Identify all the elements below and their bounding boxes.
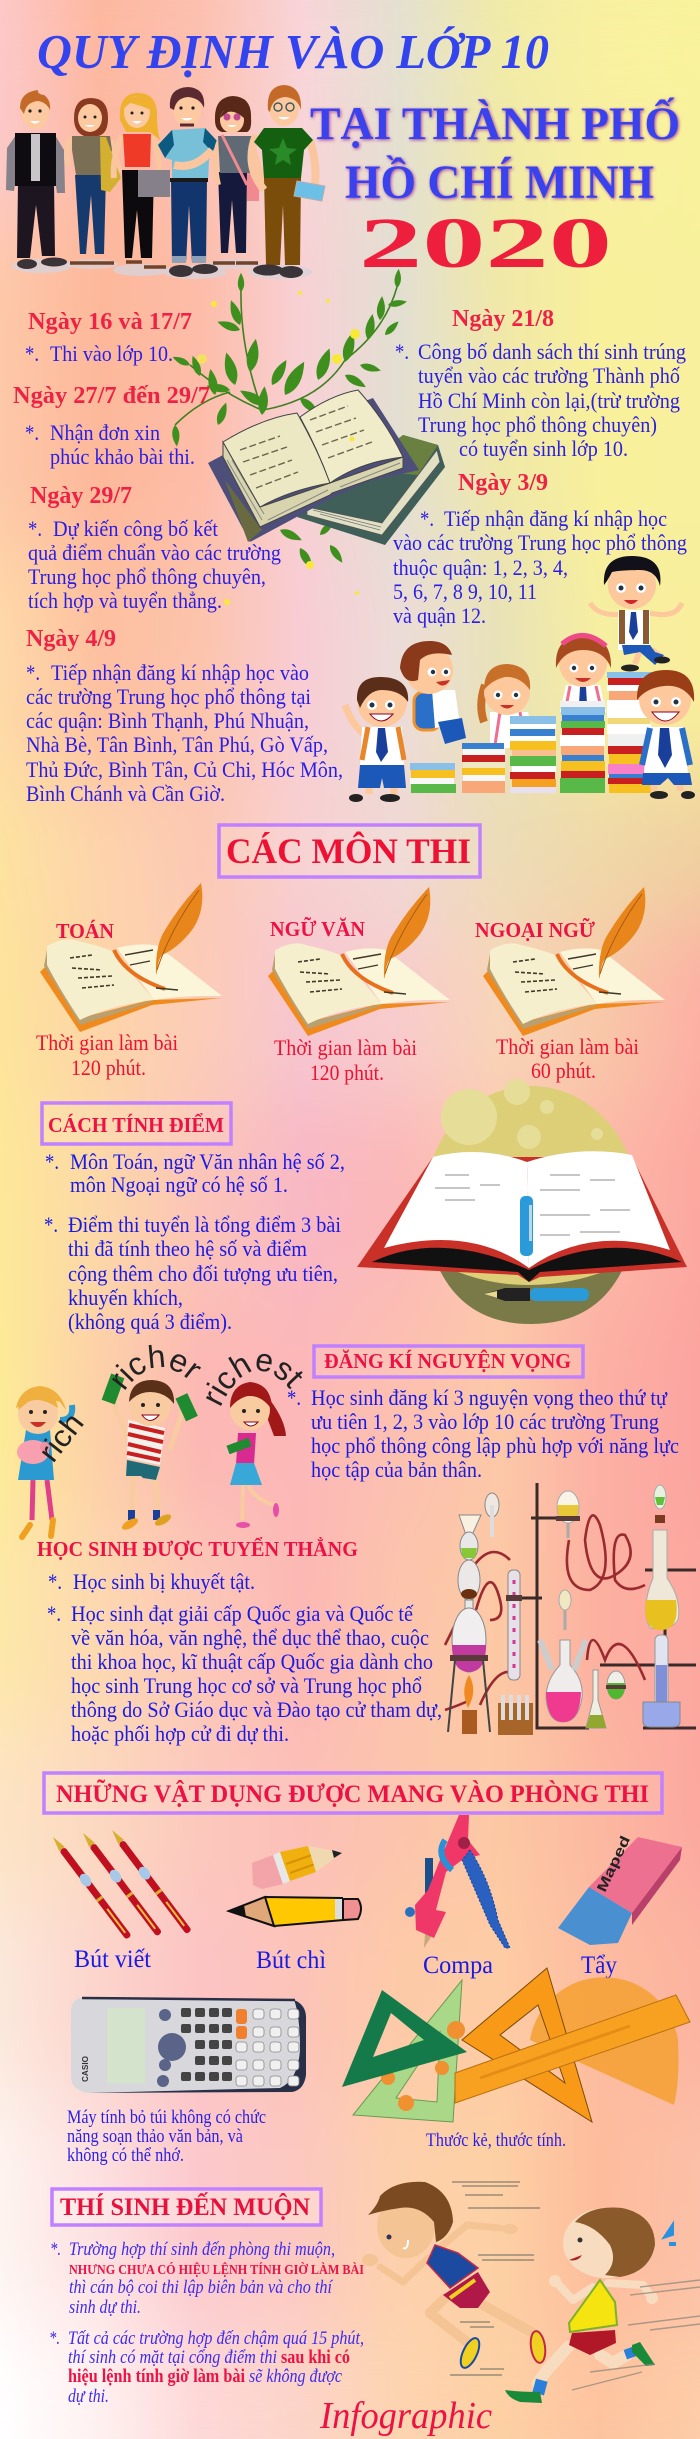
- panel: Toán: TOÁN: [56, 919, 114, 943]
- text block: left schedule: Dự kiến công bố kết: [53, 516, 218, 541]
- text block: left schedule: các trường Trung học phổ thông tại: [26, 684, 311, 709]
- labels: stationery names: [74, 1946, 617, 1979]
- heading: học sinh được tuyển thẳng: HỌC SINH ĐƯỢC TUYỂN THẲNG: [37, 1537, 358, 1561]
- text block: đăng kí nguyện vọng: [287, 1385, 679, 1482]
- text block: left schedule: *.: [28, 516, 42, 541]
- text block: tuyển thẳng: Học sinh đạt giải cấp Quốc gia và Quốc tế: [71, 1601, 414, 1626]
- text block: right schedule: [393, 306, 687, 628]
- text block: left schedule: Ngày 4/9: [26, 626, 116, 652]
- illustration: two running children: [362, 2182, 700, 2403]
- text block: late candidates: dự thi.: [68, 2386, 109, 2407]
- text block: left schedule: *.: [26, 660, 40, 685]
- illustration: big open book with pen: [357, 1079, 687, 1324]
- text block: tuyển thẳng: học sinh Trung học cơ sở và Trung học phổ: [71, 1673, 422, 1698]
- text block: late candidates: sau khi có: [281, 2347, 350, 2368]
- text block: calculator note: không có thể nhớ.: [67, 2145, 184, 2166]
- icon: eraser: Maped: [593, 1833, 633, 1894]
- text block: right schedule: thuộc quận: 1, 2, 3, 4,: [393, 555, 568, 580]
- illustration: rich richer richest children: richest: [206, 1354, 303, 1406]
- footer label: Infographic: [319, 2395, 492, 2437]
- text block: right schedule: Hồ Chí Minh còn lại,(trừ trường: [418, 388, 680, 413]
- text block: right schedule: 5, 6, 7, 8 9, 10, 11: [393, 579, 537, 604]
- title: TẠI THÀNH PHỐ: [310, 97, 680, 150]
- illustration: green books with leaves: [171, 269, 445, 605]
- illustration: chemistry lab apparatus: [445, 1483, 696, 1735]
- text block: left schedule: Trung học phổ thông chuyên,: [28, 564, 266, 589]
- title: HỒ CHÍ MINH: [345, 154, 654, 209]
- text block: left schedule: tích hợp và tuyển thẳng.: [28, 588, 222, 613]
- text block: late candidates: NHƯNG CHƯA CÓ HIỆU LỆNH TÍNH GIỜ LÀM BÀI: [69, 2261, 364, 2278]
- illustration: schoolchildren and book stacks: [345, 556, 695, 802]
- text block: left schedule: [13, 309, 343, 806]
- text block: late candidates: sẽ không được: [249, 2366, 342, 2387]
- panel: Ngoại ngữ: [475, 887, 665, 1083]
- text block: cách tính điểm: khuyến khích,: [68, 1285, 183, 1310]
- icon: calculator: [71, 1998, 306, 2093]
- text block: right schedule: Ngày 21/8: [452, 306, 554, 332]
- text block: tuyển thẳng: về văn hóa, văn nghệ, thể dục thể thao, cuộc: [71, 1625, 429, 1650]
- text block: right schedule: *.: [420, 506, 434, 531]
- text block: right schedule: có tuyển sinh lớp 10.: [459, 436, 628, 461]
- text block: đăng kí nguyện vọng: học tập của bản thân.: [311, 1457, 482, 1482]
- heading: các môn thi: CÁC MÔN THI: [226, 831, 471, 871]
- text block: đăng kí nguyện vọng: học phổ thông công lập phù hợp với năng lực: [311, 1433, 679, 1458]
- text block: left schedule: Thi vào lớp 10.: [50, 341, 173, 366]
- icon: eraser: [558, 1833, 682, 1945]
- panel: Ngữ Văn: NGỮ VĂN: [270, 917, 365, 941]
- text block: left schedule: Bình Chánh và Cần Giờ.: [26, 781, 225, 806]
- text block: left schedule: *.: [25, 341, 39, 366]
- text block: late candidates: Tất cả các trường hợp đến chậm quá 15 phút,: [68, 2328, 364, 2349]
- labels: stationery names: Compa: [423, 1952, 493, 1979]
- heading: cách tính điểm: CÁCH TÍNH ĐIỂM: [48, 1113, 224, 1137]
- illustration: rich richer richest children: richer: [112, 1344, 201, 1390]
- text block: tuyển thẳng: [47, 1569, 442, 1746]
- text block: tuyển thẳng: hoặc phối hợp cử đi dự thi.: [71, 1721, 289, 1746]
- panel: Ngữ Văn: Thời gian làm bài: [274, 1035, 417, 1060]
- labels: stationery names: Tẩy: [581, 1952, 617, 1979]
- illustration: group of six students: [6, 85, 325, 279]
- text block: tuyển thẳng: *.: [48, 1569, 62, 1594]
- text block: cách tính điểm: *.: [44, 1212, 58, 1237]
- text block: cách tính điểm: Điểm thi tuyển là tổng điểm 3 bài: [68, 1212, 341, 1237]
- text block: cách tính điểm: Môn Toán, ngữ Văn nhân hệ số 2,: [70, 1149, 345, 1174]
- text block: late candidates: *.: [49, 2328, 60, 2349]
- illustration: rich richer richest children: [16, 1344, 303, 1540]
- icon: compass: [405, 1815, 510, 1948]
- text block: left schedule: quả điểm chuẩn vào các trường: [28, 540, 281, 565]
- icon: pencils: [229, 1846, 361, 1926]
- text block: left schedule: Tiếp nhận đăng kí nhập học vào: [51, 660, 309, 685]
- text block: left schedule: Thủ Đức, Bình Tân, Củ Chi, Hóc Môn,: [26, 757, 343, 782]
- heading: những vật dụng: [44, 1773, 662, 1813]
- text block: cách tính điểm: cộng thêm cho đối tượng ưu tiên,: [68, 1261, 338, 1286]
- text block: left schedule: phúc khảo bài thi.: [50, 444, 195, 469]
- panel: Toán: [36, 883, 222, 1080]
- heading: thí sinh đến muộn: THÍ SINH ĐẾN MUỘN: [60, 2192, 310, 2221]
- panel: Toán: Thời gian làm bài: [36, 1030, 178, 1055]
- panel: Ngoại ngữ: NGOẠI NGỮ: [475, 918, 595, 942]
- labels: stationery names: Bút chì: [256, 1947, 326, 1974]
- text block: right schedule: và quận 12.: [393, 603, 486, 628]
- icon: calculator: CASIO: [81, 2056, 90, 2082]
- text block: late candidates: [49, 2239, 364, 2407]
- text block: left schedule: Ngày 29/7: [30, 483, 132, 509]
- text block: left schedule: các quận: Bình Thạnh, Phú Nhuận,: [26, 708, 309, 733]
- panel: Ngữ Văn: [268, 887, 450, 1085]
- text block: cách tính điểm: môn Ngoại ngữ có hệ số 1.: [70, 1172, 288, 1197]
- text block: right schedule: Ngày 3/9: [458, 470, 548, 496]
- text block: đăng kí nguyện vọng: ưu tiên 1, 2, 3 vào lớp 10 các trường Trung: [311, 1409, 659, 1434]
- text block: tuyển thẳng: thi khoa học, kĩ thuật cấp Quốc gia dành cho: [71, 1649, 433, 1674]
- text block: đăng kí nguyện vọng: Học sinh đăng kí 3 nguyện vọng theo thứ tự: [311, 1385, 668, 1410]
- text block: late candidates: *.: [50, 2239, 61, 2260]
- text block: cách tính điểm: thi đã tính theo hệ số và điểm: [68, 1236, 307, 1261]
- text block: tuyển thẳng: thông do Sở Giáo dục và Đào tạo cử tham dự,: [71, 1697, 442, 1722]
- heading: đăng kí nguyện vọng: ĐĂNG KÍ NGUYỆN VỌNG: [324, 1349, 571, 1373]
- text block: late candidates: Trường hợp thí sinh đến phòng thi muộn,: [69, 2239, 335, 2260]
- text block: left schedule: *.: [25, 420, 39, 445]
- icon: rulers and set squares: [342, 1968, 690, 2122]
- text block: late candidates: hiệu lệnh tính giờ làm bài: [68, 2366, 245, 2387]
- panel: Toán: 120 phút.: [71, 1055, 146, 1080]
- text block: left schedule: Nhận đơn xin: [50, 420, 160, 445]
- text block: calculator note: [67, 2107, 266, 2166]
- text block: cách tính điểm: [44, 1149, 345, 1334]
- title: 2020: [359, 203, 612, 283]
- heading: những vật dụng: NHỮNG VẬT DỤNG ĐƯỢC MANG VÀO PHÒNG THI: [56, 1779, 649, 1808]
- title: QUY ĐỊNH VÀO LỚP 10: [37, 24, 549, 79]
- panel: Ngữ Văn: 120 phút.: [310, 1060, 384, 1085]
- panel: Ngoại ngữ: 60 phút.: [531, 1058, 596, 1083]
- caption: rulers: Thước kẻ, thước tính.: [426, 2130, 566, 2151]
- illustration: rich richer richest children: rich: [33, 1407, 91, 1468]
- text block: right schedule: *.: [395, 339, 409, 364]
- text block: tuyển thẳng: Học sinh bị khuyết tật.: [73, 1569, 255, 1594]
- text block: left schedule: Nhà Bè, Tân Bình, Tân Phú, Gò Vấp,: [26, 732, 328, 757]
- text block: đăng kí nguyện vọng: *.: [287, 1385, 301, 1410]
- text block: right schedule: Trung học phổ thông chuyên): [418, 412, 657, 437]
- heading: cách tính điểm: [42, 1103, 231, 1144]
- text block: calculator note: năng soạn thảo văn bản, và: [67, 2126, 243, 2147]
- text block: left schedule: Ngày 27/7 đến 29/7: [13, 383, 210, 409]
- title: [37, 24, 680, 283]
- text block: late candidates: sinh dự thi.: [69, 2297, 141, 2318]
- text block: late candidates: thí sinh có mặt tại cổng điểm thi: [68, 2347, 277, 2368]
- text block: calculator note: Máy tính bỏ túi không có chức: [67, 2107, 266, 2128]
- text block: tuyển thẳng: *.: [47, 1601, 61, 1626]
- text block: right schedule: tuyển vào các trường Thành phố: [418, 363, 680, 388]
- panel: Ngoại ngữ: Thời gian làm bài: [496, 1034, 639, 1059]
- text block: cách tính điểm: (không quá 3 điểm).: [68, 1309, 232, 1334]
- labels: stationery names: Bút viết: [74, 1946, 151, 1973]
- icon: three red pens: [49, 1827, 193, 1941]
- text block: right schedule: Tiếp nhận đăng kí nhập học: [444, 506, 667, 531]
- text block: late candidates: thì cán bộ coi thi lập biên bản và cho thí: [69, 2277, 333, 2298]
- text block: cách tính điểm: *.: [45, 1149, 59, 1174]
- text block: left schedule: Ngày 16 và 17/7: [28, 309, 192, 335]
